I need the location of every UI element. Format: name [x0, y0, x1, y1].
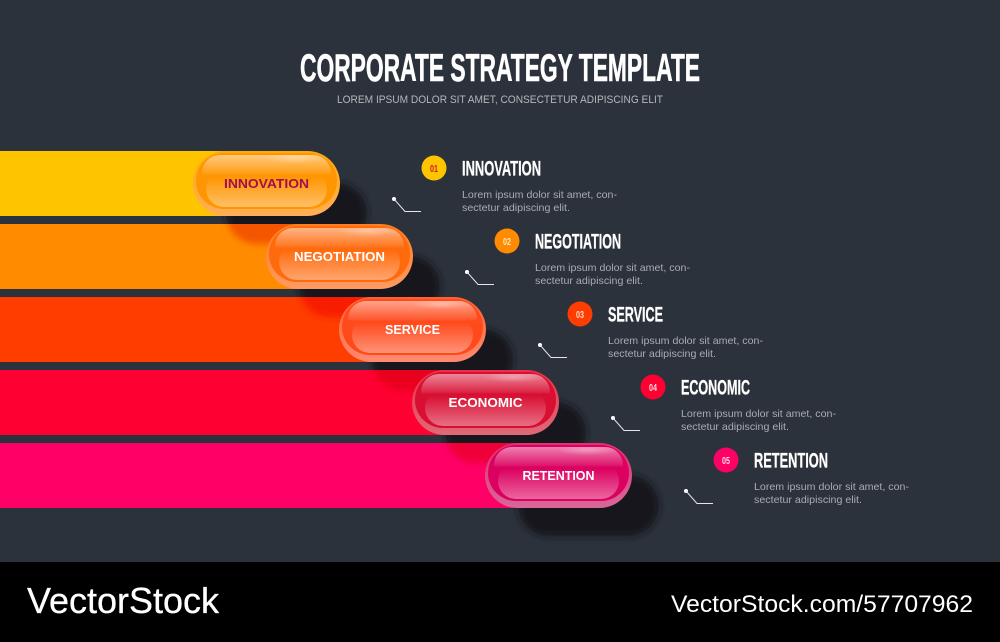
- description 03: Lorem ipsum dolor sit amet, con-: [608, 335, 763, 347]
- bar: retention: [0, 443, 550, 508]
- shadow cast on retention bar: [444, 443, 516, 466]
- description 04: sectetur adipiscing elit.: [681, 421, 789, 433]
- bar: service: [0, 297, 410, 362]
- heading 01: INNOVATION: [462, 158, 541, 180]
- description 05: Lorem ipsum dolor sit amet, con-: [754, 481, 909, 493]
- item 01: innovation: [392, 156, 617, 214]
- number badge 04: 04: [649, 383, 657, 394]
- item 05: retention: [684, 448, 909, 506]
- description 05: sectetur adipiscing elit.: [754, 494, 862, 506]
- bar: economic: [0, 370, 480, 435]
- bar: innovation: [0, 151, 270, 216]
- heading 02: NEGOTIATION: [535, 230, 621, 254]
- item 04: economic: [611, 374, 836, 433]
- heading 03: SERVICE: [608, 304, 663, 326]
- number badge 01: [422, 156, 446, 180]
- pill: service: [339, 297, 486, 362]
- number badge 01: 01: [430, 164, 438, 175]
- number badge 03: 03: [576, 310, 584, 321]
- connector 01: [392, 197, 421, 212]
- subtitle: LOREM IPSUM DOLOR SIT AMET, CONSECTETUR ADIPISCING ELIT: [337, 94, 663, 106]
- item 02: negotiation: [465, 228, 690, 287]
- shadow cast on service bar: [298, 297, 368, 320]
- number badge 05: [714, 448, 738, 472]
- number badge 02: 02: [503, 237, 511, 248]
- description 01: sectetur adipiscing elit.: [462, 202, 570, 214]
- description 02: sectetur adipiscing elit.: [535, 275, 643, 287]
- connector 04: [611, 416, 640, 430]
- pill: economic: [412, 370, 559, 435]
- pill: service: SERVICE: [385, 322, 440, 337]
- heading 05: RETENTION: [754, 450, 828, 472]
- bar: negotiation: [0, 224, 340, 289]
- footer url: VectorStock.com/57707962: [671, 591, 973, 618]
- footer bar: [0, 562, 1000, 642]
- description 04: Lorem ipsum dolor sit amet, con-: [681, 408, 836, 420]
- pill: innovation: INNOVATION: [224, 176, 309, 191]
- number badge 02: [494, 228, 520, 254]
- footer logo text: VectorStock: [27, 580, 220, 621]
- pill: retention: [485, 443, 632, 508]
- connector 05: [684, 489, 713, 504]
- pill: retention: RETENTION: [522, 468, 594, 483]
- description 03: sectetur adipiscing elit.: [608, 348, 716, 360]
- description 01: Lorem ipsum dolor sit amet, con-: [462, 189, 617, 201]
- connector 02: [465, 270, 494, 284]
- heading 04: ECONOMIC: [681, 376, 750, 400]
- number badge 05: 05: [722, 456, 730, 467]
- pill: negotiation: NEGOTIATION: [294, 249, 385, 264]
- shadow cast on economic bar: [370, 370, 441, 392]
- pill: negotiation: [266, 224, 413, 289]
- number badge 04: [640, 374, 666, 400]
- title: CORPORATE STRATEGY TEMPLATE: [300, 47, 700, 90]
- shadow cast on negotiation bar: [224, 224, 296, 248]
- pill: innovation: [193, 151, 340, 216]
- pill: economic: ECONOMIC: [448, 395, 523, 410]
- number badge 03: [568, 302, 592, 326]
- connector 03: [538, 343, 567, 358]
- description 02: Lorem ipsum dolor sit amet, con-: [535, 262, 690, 274]
- pill shadows on background: [226, 183, 659, 536]
- item 03: service: [538, 302, 763, 360]
